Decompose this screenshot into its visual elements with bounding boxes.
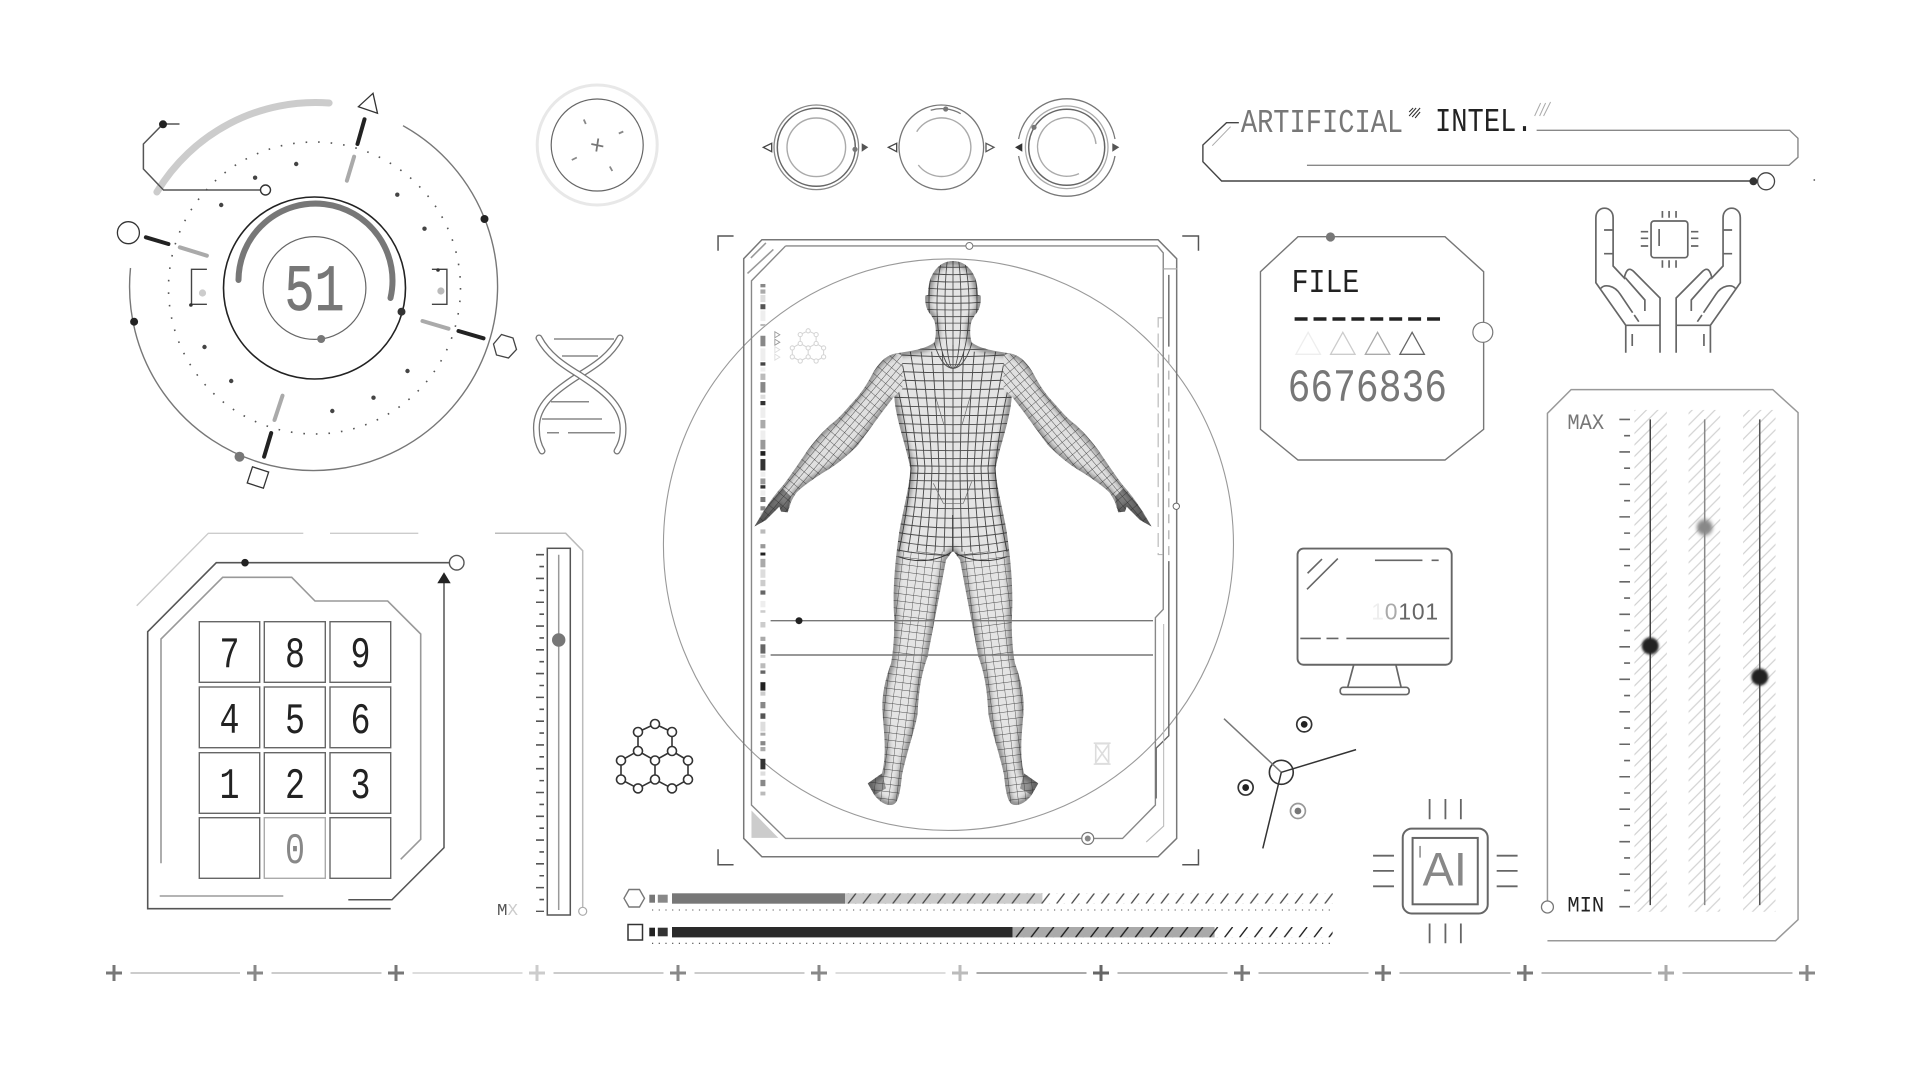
keypad digits: 8	[285, 631, 305, 681]
title text: artificial: ARTIFICIAL	[1241, 105, 1403, 142]
frame outer border	[744, 240, 1177, 857]
gauge ring dots	[317, 308, 406, 343]
frame right rails	[1146, 269, 1177, 842]
torso vertical mesh right	[952, 345, 1008, 552]
title text: intel: INTEL.	[1435, 104, 1533, 141]
gauge light progress arc	[157, 102, 329, 192]
icon: monitor	[1298, 549, 1452, 695]
barcode strip	[760, 284, 765, 795]
title hatch mark	[1409, 108, 1420, 118]
file panel: FILE	[1292, 265, 1359, 302]
faint molecule	[790, 329, 826, 363]
body edge shading	[868, 261, 1038, 805]
molecule icon	[616, 720, 692, 793]
scan line marker	[796, 617, 802, 624]
ring widget 3	[1015, 99, 1119, 196]
file panel	[1260, 232, 1493, 460]
icon: hands holding chip	[1596, 208, 1740, 353]
gauge right bracket	[432, 268, 447, 304]
left hand	[1596, 208, 1660, 353]
left leg mesh	[863, 552, 953, 808]
icon: monitor: 10101	[1371, 598, 1439, 624]
gauge shapes: hexagon	[494, 334, 516, 358]
right hand	[1676, 208, 1740, 353]
faint hourglass	[1094, 743, 1111, 764]
keypad frame end circle	[449, 555, 464, 570]
gauge outer ring	[130, 126, 498, 471]
icon: DNA helix	[536, 338, 623, 451]
vertical slider: MX	[497, 902, 518, 921]
central body frame	[663, 236, 1233, 865]
faint triangles column	[775, 332, 780, 345]
keypad dark frame	[148, 563, 449, 909]
keypad digits: 1	[220, 762, 240, 812]
right slider panel	[1541, 390, 1798, 941]
ring widget 2	[888, 105, 994, 190]
torso horizontal mesh	[894, 348, 1012, 556]
gauge value: 51	[284, 255, 344, 330]
slider scale ticks	[1625, 419, 1627, 908]
torso vertical mesh left	[898, 352, 946, 552]
gauge scattered dots	[202, 162, 427, 413]
gauge inner thin ring	[263, 237, 366, 339]
body head, torso and legs	[868, 261, 1038, 806]
bottom plus ruler	[106, 965, 1815, 981]
file panel: 6676836	[1288, 363, 1447, 415]
slider knob 1	[1642, 638, 1659, 654]
gauge shapes: circle	[117, 222, 139, 244]
corner brackets	[718, 236, 1198, 865]
scan lines	[771, 621, 1153, 655]
gauge shapes: triangle	[358, 93, 378, 113]
crosshair dial	[537, 85, 657, 205]
keypad gray inner frame	[161, 577, 421, 863]
body right arm	[1000, 350, 1153, 530]
title panel	[1203, 102, 1815, 190]
frame inner border	[751, 246, 1163, 838]
keypad digits: 2	[285, 762, 305, 812]
gauge ring markers	[130, 215, 488, 462]
body left arm	[753, 350, 906, 530]
keypad digits: 3	[350, 762, 370, 812]
keypad digits: 6	[350, 697, 370, 747]
keypad panel	[137, 533, 464, 909]
head mesh	[925, 261, 981, 369]
frame corner lines	[747, 243, 773, 273]
keypad digits: 9	[350, 631, 370, 681]
foot shadow	[868, 773, 1038, 795]
tri-spoke with targets	[1224, 717, 1356, 848]
keypad arrow	[348, 572, 451, 900]
title light slashes	[1535, 102, 1551, 116]
gauge radial ticks	[146, 119, 484, 457]
ring widget 1	[763, 105, 868, 190]
gauge dotted ring	[168, 142, 460, 434]
chip	[1641, 211, 1698, 268]
keypad light outer lines	[137, 533, 418, 606]
keypad frame start dot	[241, 559, 249, 566]
slider panel frame	[1547, 390, 1798, 941]
icon: AI chip	[1373, 799, 1518, 943]
gauge gray arc	[238, 204, 392, 298]
progress bar 2	[628, 924, 1333, 943]
frame node circles	[966, 242, 1179, 844]
title panel frame	[1203, 123, 1815, 190]
keypad digits: 7	[220, 631, 240, 681]
slider tracks	[1650, 419, 1760, 905]
min label: MIN	[1567, 893, 1604, 918]
keypad digits: 0	[285, 827, 305, 877]
gauge left bracket	[189, 269, 207, 307]
gauge connector	[143, 120, 270, 195]
progress bar 1	[624, 890, 1333, 910]
keypad bottom line	[160, 895, 283, 897]
vertical slider	[495, 533, 587, 921]
right leg mesh	[956, 552, 1037, 805]
gauge inner dark ring	[224, 197, 406, 379]
keypad digits	[220, 631, 370, 877]
keypad keys	[199, 622, 391, 878]
keypad digits: 4	[220, 697, 240, 747]
corner triangle	[751, 811, 778, 838]
radial gauge	[117, 93, 517, 488]
wireframe human body	[753, 235, 1153, 808]
slider knob 3	[1751, 669, 1768, 685]
slider knob 2	[1697, 519, 1713, 535]
slider panel node	[1541, 901, 1553, 913]
fainter triangles column	[775, 347, 780, 360]
body soft creases	[933, 395, 972, 503]
max label: MAX	[1567, 411, 1604, 436]
body scanner circle	[663, 259, 1233, 830]
body base shading	[863, 258, 1043, 808]
slider hatch columns	[1634, 410, 1776, 912]
gauge shapes: square	[247, 467, 269, 488]
icon: AI chip: AI	[1423, 843, 1467, 895]
body folds	[898, 515, 1007, 561]
keypad digits: 5	[285, 697, 305, 747]
